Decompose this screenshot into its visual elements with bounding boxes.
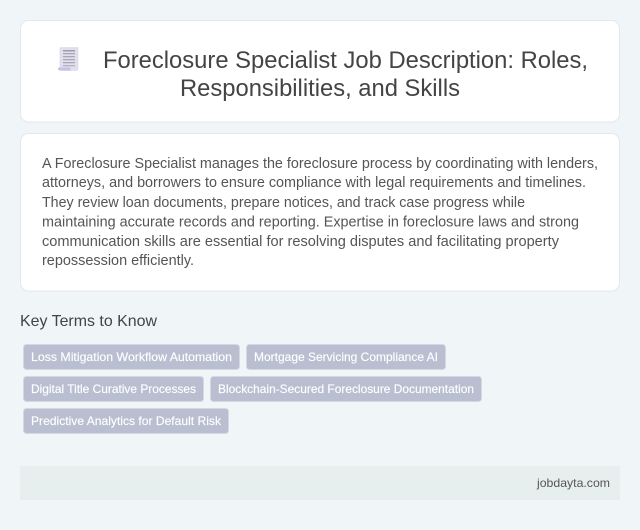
description text: repossession efficiently. [42, 253, 194, 269]
footer [20, 466, 620, 500]
footer: jobdayta.com [536, 476, 610, 490]
icon: document scroll [58, 48, 78, 70]
heading: key terms: Key Terms to Know [20, 313, 157, 330]
title: Foreclosure Specialist Job Description: Roles, [103, 47, 588, 74]
tag: mortgage servicing [246, 344, 446, 370]
description text: attorneys, and borrowers to ensure compliance with legal requirements and timelines. [42, 175, 586, 191]
tag: loss mitigation: Loss Mitigation Workflow Automation [31, 350, 232, 364]
description text: maintaining accurate records and reporting. Expertise in foreclosure laws and strong [42, 214, 579, 230]
tag: loss mitigation [24, 344, 240, 370]
description text: A Foreclosure Specialist manages the foreclosure process by coordinating with lenders, [42, 156, 598, 172]
tag: blockchain [210, 376, 482, 402]
description text [42, 156, 598, 269]
panel: title card [20, 20, 620, 122]
title [103, 47, 588, 102]
tag: blockchain: Blockchain-Secured Foreclosure Documentation [218, 382, 474, 396]
description text: communication skills are essential for resolving disputes and facilitating property [42, 234, 560, 250]
key term tags [24, 344, 482, 434]
tag: mortgage servicing: Mortgage Servicing Compliance AI [254, 350, 438, 364]
description text: They review loan documents, prepare notices, and track case progress while [42, 195, 525, 211]
tag: digital title: Digital Title Curative Processes [31, 382, 196, 396]
tag: predictive analytics: Predictive Analytics for Default Risk [31, 414, 222, 428]
tag: predictive analytics [24, 408, 228, 434]
tag: digital title [24, 376, 204, 402]
panel: description card [20, 134, 620, 291]
title: Responsibilities, and Skills [180, 75, 460, 102]
